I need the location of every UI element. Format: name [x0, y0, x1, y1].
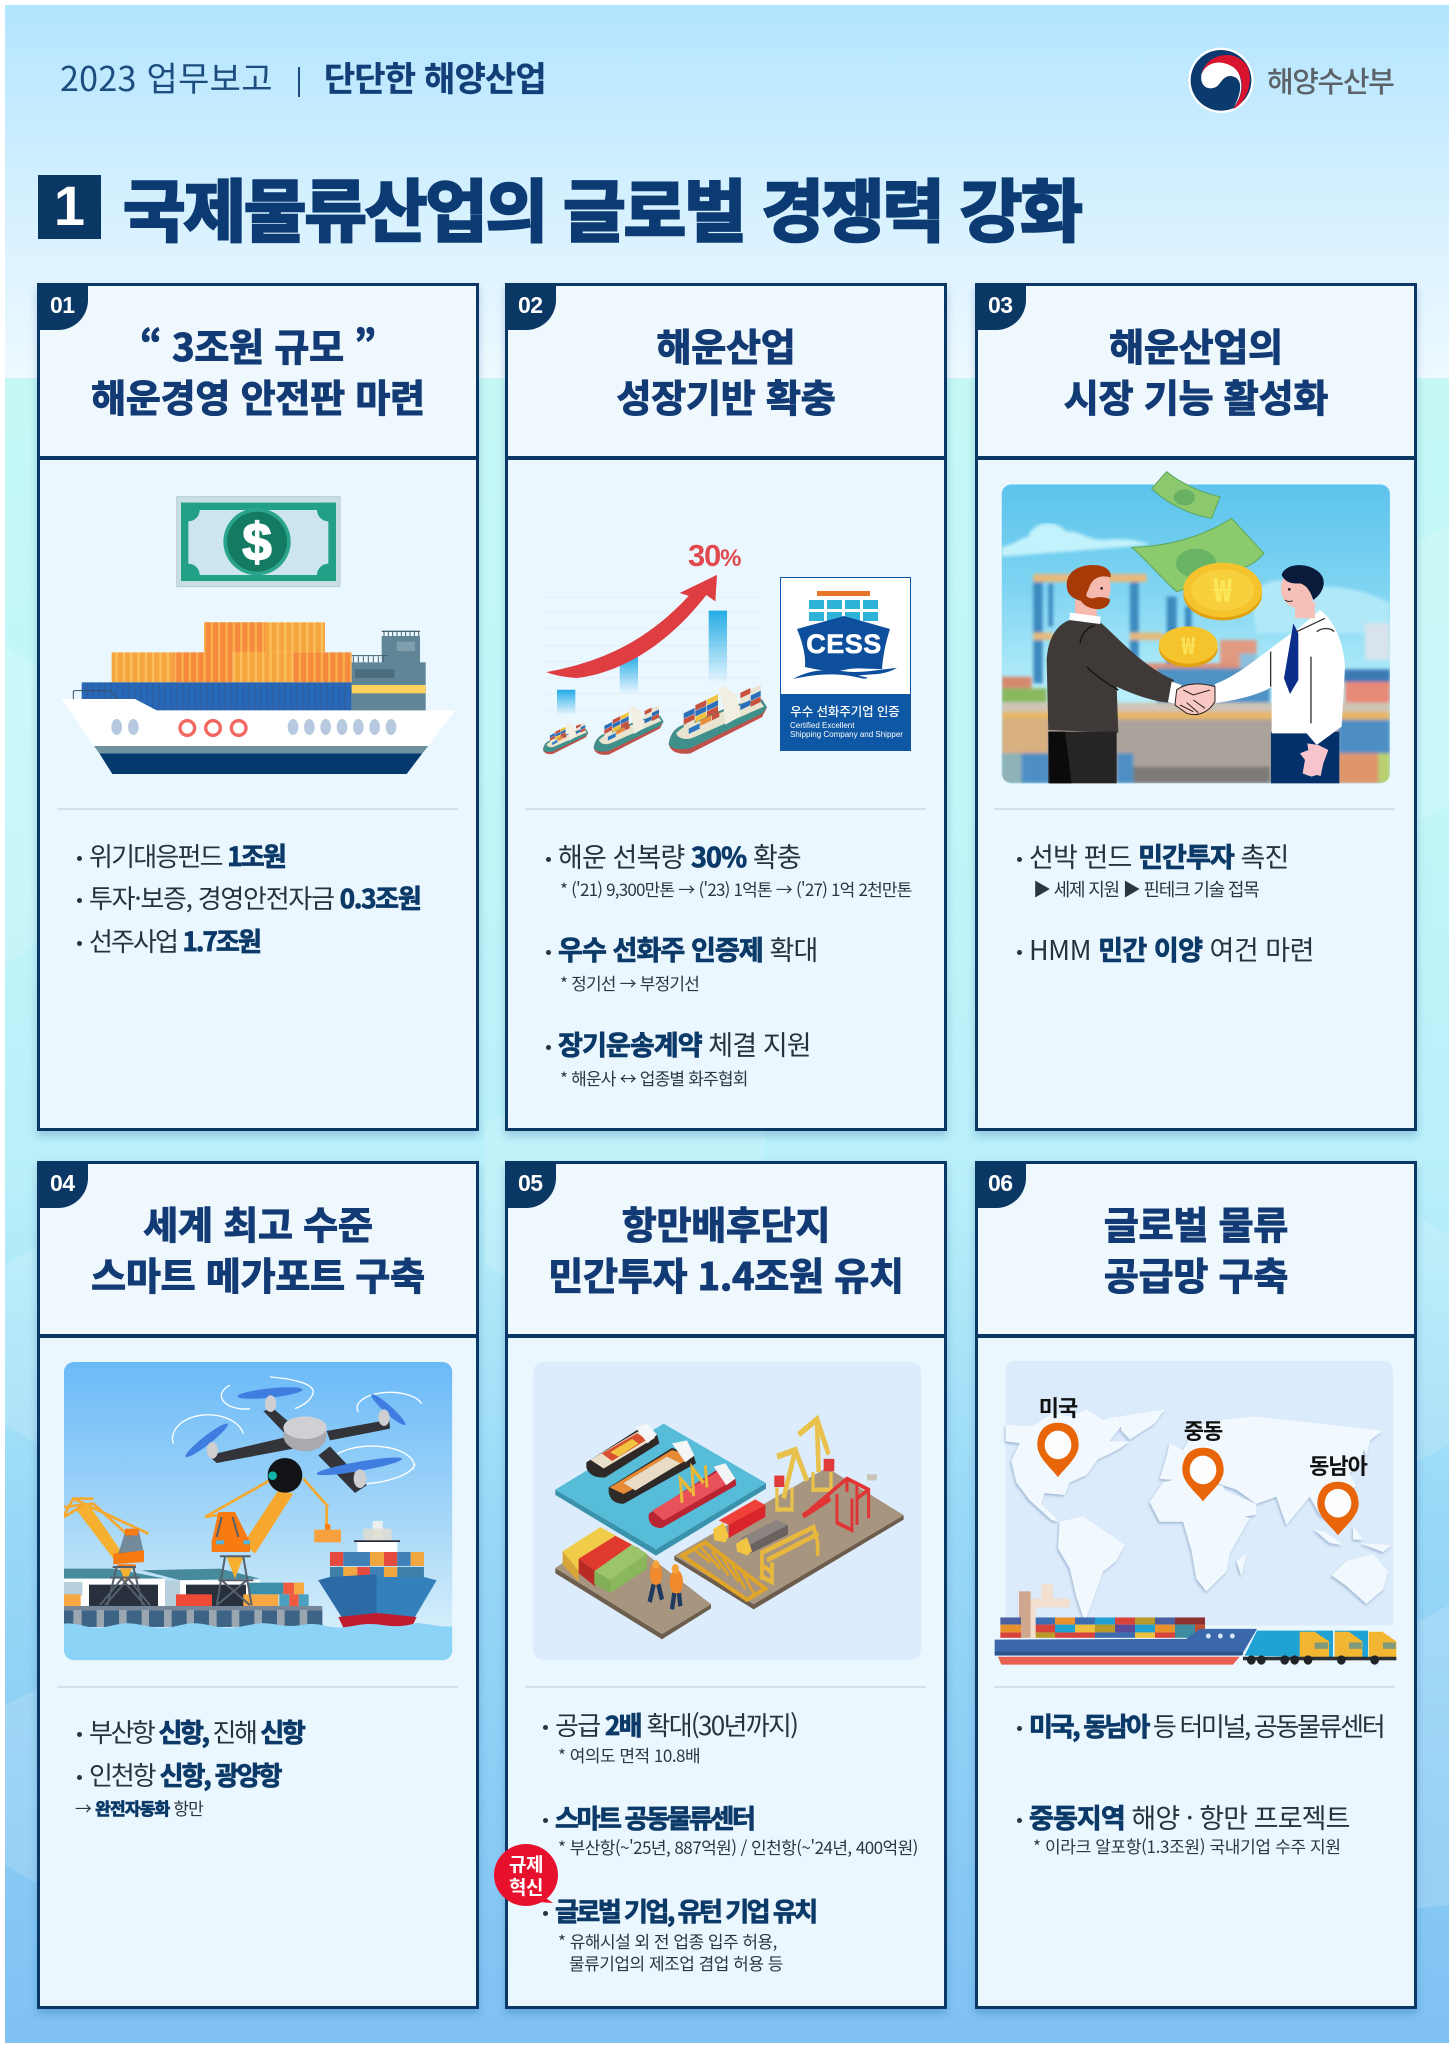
number badge 01: [37, 283, 88, 330]
section number box: 1: [54, 174, 85, 237]
number badge 04: 04: [50, 1170, 75, 1196]
crane right with load: [205, 1478, 341, 1605]
callout: regulatory innovation: 규제: [509, 1850, 543, 1877]
icon: small ships: [543, 673, 767, 754]
panel 04: smart megaport: [37, 1161, 479, 2009]
panel 05 bullet list: 스마트 공동물류센터: [555, 1799, 754, 1836]
callout: regulatory innovation: 혁신: [509, 1873, 543, 1900]
icon: banknote: $: [242, 513, 272, 572]
section number box: [38, 175, 101, 239]
CESS certification badge: Certified Excellent: [790, 721, 855, 730]
illustration: handshake and money: [1002, 471, 1390, 784]
panel 02 bullet list: 해운 선복량 30% 확충: [558, 836, 801, 875]
number badge 03: [975, 283, 1026, 330]
bars: [557, 610, 727, 715]
panel 03 heading: 해운산업의: [1109, 317, 1283, 372]
panel 04 bullet list: → 완전자동화 항만: [75, 1795, 203, 1820]
panel 04 bullet list: 부산항 신항, 진해 신항: [89, 1713, 303, 1750]
illustration: world map with ship and trucks: [994, 1361, 1396, 1665]
number badge 01: 01: [50, 292, 75, 318]
panel 01 bullet list: 위기대응펀드 1조원: [89, 837, 285, 874]
panel 01 heading: “ 3조원 규모 ”: [140, 317, 376, 372]
illustration: isometric port: [533, 1362, 922, 1660]
panel 02: shipping growth: [505, 283, 947, 1131]
panel 05 heading: 민간투자 1.4조원 유치: [548, 1246, 904, 1301]
panel 05 bullet list: [543, 1706, 918, 1975]
icon: gold coins: ₩: [1180, 627, 1196, 661]
chart: fleet growth with ships: [542, 574, 767, 755]
callout: regulatory innovation: [494, 1844, 558, 1906]
panel 01 heading: [91, 317, 425, 423]
ground platforms: [555, 1468, 903, 1639]
panel 04 bullet list: [75, 1713, 306, 1820]
panel 06 bullet list: [1017, 1707, 1383, 1858]
pier: [64, 1606, 322, 1627]
icon: banknote: [177, 497, 340, 587]
chart label 30%: 30%: [688, 538, 740, 573]
CESS certification badge: [780, 577, 911, 751]
ships: [586, 1424, 736, 1528]
report label: 2023 업무보고 단단한 해양산업: [60, 52, 546, 101]
panel 03 bullet list: ▶ 세제 지원 ▶ 핀테크 기술 접목: [1033, 876, 1259, 902]
panel 06 bullet list: * 이라크 알포항(1.3조원) 국내기업 수주 지원: [1033, 1833, 1341, 1858]
number badge 05: [505, 1161, 556, 1208]
number badge 02: 02: [518, 292, 543, 318]
workers: [649, 1560, 683, 1609]
panel 04 bullet list: 인천항 신항, 광양항: [89, 1756, 280, 1793]
number badge 05: 05: [518, 1170, 543, 1196]
panel 06: global supply chain: [975, 1161, 1417, 2009]
panel 02 heading: 성장기반 확충: [616, 368, 836, 423]
panel 06 bullet list: 미국, 동남아 등 터미널, 공동물류센터: [1029, 1707, 1383, 1744]
panel 06 heading: 공급망 구축: [1104, 1246, 1288, 1301]
map label 동남아: 동남아: [1309, 1449, 1367, 1481]
panel 03: market activation: [975, 283, 1417, 1131]
sky: [64, 1362, 452, 1628]
icon: handshake: [1175, 684, 1215, 715]
panel 02 heading: 해운산업: [656, 317, 796, 372]
panel 06 heading: [1104, 1195, 1288, 1301]
arrow: upward trend: [546, 574, 717, 678]
number badge 04: [37, 1161, 88, 1208]
panel 05 bullet list: * 부산항(~'25년, 887억원) / 인천항(~'24년, 400억원): [558, 1834, 918, 1859]
figure: man with beard: [1047, 565, 1182, 783]
panel 01 bullet list: 투자·보증, 경영안전자금 0.3조원: [89, 879, 421, 916]
panel 04 heading: 세계 최고 수준: [143, 1195, 373, 1250]
panel 01 bullet list: [77, 837, 421, 959]
panel 05 bullet list: * 유해시설 외 전 업종 입주 허용,: [558, 1928, 777, 1953]
map label 미국: 미국: [1039, 1391, 1077, 1423]
panel 06 bullet list: 중동지역 해양 · 항만 프로젝트: [1029, 1797, 1350, 1836]
panel 03 heading: 시장 기능 활성화: [1064, 368, 1328, 423]
port cranes: [774, 1419, 834, 1509]
map label 중동: 중동: [1184, 1414, 1222, 1446]
panel 03 heading: [1064, 317, 1328, 423]
number badge 06: 06: [988, 1170, 1013, 1196]
container ship: [318, 1521, 437, 1627]
panel 02 bullet list: * 해운사 ↔ 업종별 화주협회: [560, 1065, 748, 1090]
grid lines: [544, 597, 760, 710]
trucks: [713, 1499, 788, 1556]
panel 05 heading: 항만배후단지: [622, 1195, 830, 1250]
icon: container ship: [62, 622, 455, 774]
panel 05 bullet list: 물류기업의 제조업 겸업 허용 등: [569, 1950, 783, 1975]
port background: [1002, 484, 1390, 783]
illustration: banknote and container ship: [62, 496, 455, 774]
icon: falling banknotes: [1132, 472, 1264, 592]
panel 02 bullet list: 우수 선화주 인증제 확대: [558, 929, 817, 968]
panel 05 bullet list: 글로벌 기업, 유턴 기업 유치: [555, 1892, 816, 1929]
panel 03 bullet list: HMM 민간 이양 여건 마련: [1029, 929, 1314, 968]
panel 02 heading: [616, 317, 836, 423]
red container crane: [803, 1474, 877, 1530]
sea: [64, 1623, 452, 1660]
panel 02 bullet list: * ('21) 9,300만톤 → ('23) 1억톤 → ('27) 1억 2천만톤: [560, 876, 912, 901]
water platform: [555, 1424, 766, 1556]
icon: gold coins: ₩: [1212, 566, 1233, 612]
number badge 03: 03: [988, 292, 1013, 318]
icon: drone: [173, 1377, 422, 1493]
panel 01 heading: 해운경영 안전판 마련: [91, 368, 425, 423]
icon: gold coins: [1159, 563, 1262, 667]
figure: man in shirt and tie: [1213, 565, 1345, 783]
panel 01 bullet list: 선주사업 1.7조원: [89, 922, 260, 959]
crane left: [64, 1498, 150, 1605]
panel 04 heading: 스마트 메가포트 구축: [91, 1246, 425, 1301]
panel 05 bullet list: * 여의도 면적 10.8배: [558, 1742, 700, 1767]
panel 02 bullet list: [546, 836, 912, 1090]
ministry logo: [1188, 48, 1394, 113]
panel 05 heading: [548, 1195, 904, 1301]
number badge 02: [505, 283, 556, 330]
CESS certification badge: 우수 선화주기업 인증: [790, 701, 900, 720]
illustration: drone over port: [64, 1362, 452, 1660]
panel 03 bullet list: 선박 펀드 민간투자 촉진: [1029, 836, 1288, 875]
world map continents: [1006, 1410, 1392, 1622]
panel 05 bullet list: 공급 2배 확대(30년까지): [555, 1706, 797, 1743]
ministry name: 해양수산부: [1267, 59, 1393, 101]
panel 04 heading: [91, 1195, 425, 1301]
cargo containers: [176, 1582, 309, 1606]
main title: 국제물류산업의 글로벌 경쟁력 강화: [123, 157, 1081, 256]
number badge 06: [975, 1161, 1026, 1208]
yellow gantry: [759, 1527, 818, 1582]
container ship: [995, 1585, 1257, 1665]
panel 06 heading: 글로벌 물류: [1104, 1195, 1288, 1250]
panel 05: port hinterland investment: [505, 1161, 947, 2009]
panel 03 bullet list: [1017, 836, 1314, 968]
icon: taegeuk emblem: [1188, 48, 1254, 113]
panel 02 bullet list: 장기운송계약 체결 지원: [558, 1024, 811, 1063]
CESS certification badge: CESS: [806, 629, 882, 659]
icon: location pins: [1038, 1423, 1359, 1536]
stacked containers: [562, 1527, 647, 1593]
panel 02 bullet list: * 정기선 → 부정기선: [560, 970, 699, 995]
panel 01: safety net: [37, 283, 479, 1131]
trucks: [1243, 1631, 1397, 1665]
warehouses: [64, 1568, 260, 1607]
CESS certification badge: Shipping Company and Shipper: [790, 730, 903, 739]
